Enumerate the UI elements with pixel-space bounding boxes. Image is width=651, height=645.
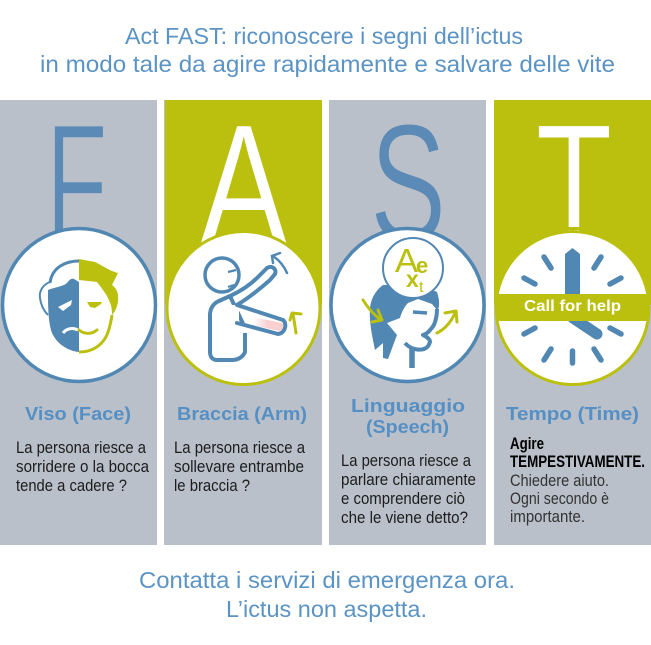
text: time advice: importante. [510, 507, 585, 526]
text: arm question: La persona riesce a [174, 438, 305, 457]
text: speech question: e comprendere ciò [341, 489, 465, 508]
speech icon circle: x [406, 266, 419, 292]
text: face question: La persona riesce a [16, 438, 146, 457]
face icon circle [2, 228, 156, 382]
letter T: T [536, 91, 612, 277]
text: speech question [341, 451, 476, 527]
text: arm question: sollevare entrambe [174, 457, 304, 476]
heading: Viso: Viso (Face) [25, 404, 131, 424]
panel: A arm [164, 88, 322, 545]
text: face question [16, 438, 149, 495]
title [40, 23, 615, 77]
text: speech question: parlare chiaramente [341, 470, 476, 489]
text: time advice: Ogni secondo è [510, 489, 609, 508]
speech icon circle: e [416, 253, 428, 278]
footer message [139, 567, 515, 622]
text: time advice [510, 434, 645, 526]
letter S: S [370, 90, 446, 277]
speech icon circle [331, 228, 484, 382]
text: arm question: le braccia ? [174, 476, 250, 495]
text: arm question [174, 438, 305, 495]
text: speech question: che le viene detto? [341, 508, 468, 527]
clock icon circle [496, 232, 649, 384]
letter F: F [46, 91, 108, 277]
panel: S speech [329, 90, 486, 545]
footer message: L’ictus non aspetta. [226, 596, 427, 622]
arm icon circle [167, 232, 320, 384]
heading: Linguaggio: (Speech) [366, 417, 449, 437]
footer message: Contatta i servizi di emergenza ora. [139, 567, 515, 593]
heading: Linguaggio [351, 396, 465, 437]
title: in modo tale da agire rapidamente e salvare delle vite [40, 51, 615, 77]
text: time advice: Chiedere aiuto. [510, 471, 609, 490]
text: face question: tende a cadere ? [16, 476, 127, 495]
panel: F face [0, 91, 157, 545]
heading: Linguaggio: Linguaggio [351, 396, 465, 416]
text: time advice: Agire [510, 434, 544, 453]
panel: T time [494, 91, 651, 545]
letter A: A [200, 88, 288, 283]
text: speech question: La persona riesce a [341, 451, 471, 470]
speech icon circle: A [395, 242, 418, 279]
label: call for help: Call for help [524, 298, 621, 315]
heading: Tempo: Tempo (Time) [506, 404, 639, 424]
text: face question: sorridere o la bocca [16, 457, 149, 476]
speech icon circle: t [419, 279, 424, 296]
title: Act FAST: riconoscere i segni dell’ictus [125, 23, 523, 49]
heading: Braccia: Braccia (Arm) [177, 404, 307, 424]
